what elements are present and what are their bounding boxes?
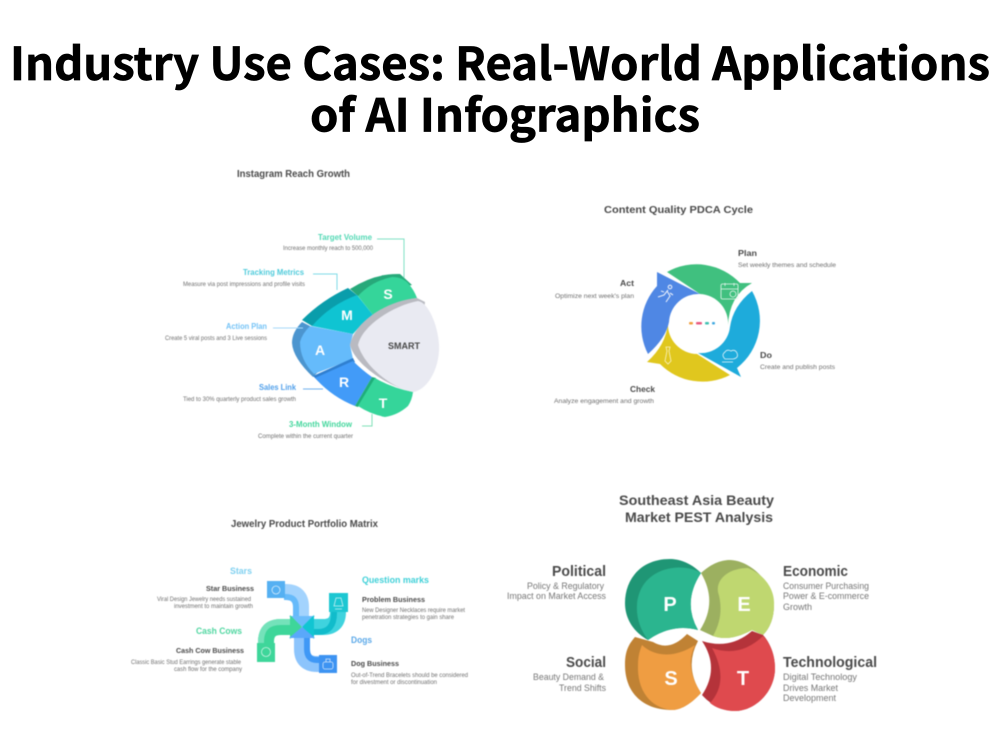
label: Target Volume: Increase monthly reach to 500,000	[283, 246, 374, 252]
label: Stars: Stars	[230, 566, 252, 576]
label: Plan: Plan	[738, 248, 757, 258]
label: Check: Analyze engagement and growth	[554, 398, 654, 405]
PEST letters: S	[664, 668, 678, 690]
SMART letters: S	[383, 286, 393, 302]
label: Economic: Consumer Purchasing	[783, 581, 869, 591]
SMART letters: T	[379, 395, 388, 411]
SMART letters: R	[339, 374, 349, 390]
label: Political: Impact on Market Access	[507, 591, 606, 601]
heading: Southeast Asia Beauty Market PEST Analysis: Southeast Asia Beauty	[619, 492, 774, 508]
label: Social: Trend Shifts	[559, 683, 606, 693]
label: Do: Create and publish posts	[760, 364, 836, 371]
PEST P segment	[625, 559, 701, 640]
label: Sales Link: Sales Link	[259, 383, 297, 392]
label: Technological: Technological	[783, 654, 877, 671]
label: Economic: Economic	[783, 563, 848, 580]
label: 3-Month Window: 3-Month Window	[289, 420, 353, 429]
label: Do: Do	[760, 350, 772, 360]
label: Question marks: penetration strategies to gain share	[362, 615, 455, 621]
title: Industry Use Cases: Real-World Applications	[10, 28, 990, 93]
heading: Southeast Asia Beauty Market PEST Analysis	[619, 492, 774, 525]
label: Act: Act	[620, 278, 634, 288]
PEST T segment	[702, 631, 775, 711]
label: 3-Month Window	[258, 420, 353, 440]
heading: Southeast Asia Beauty Market PEST Analysis: Market PEST Analysis	[625, 509, 773, 525]
label: Sales Link: Tied to 30% quarterly product sales growth	[183, 397, 296, 403]
swirl arrows	[261, 592, 338, 664]
label: Check: Check	[630, 384, 655, 394]
label: Question marks	[362, 575, 465, 621]
label: Political	[507, 563, 606, 601]
heading: Jewelry Product Portfolio Matrix: Jewelry Product Portfolio Matrix	[231, 519, 378, 530]
icon: cloud	[722, 350, 738, 362]
SMART letters: SMART	[388, 341, 420, 351]
label: Do	[760, 350, 836, 371]
label: Economic: Growth	[783, 602, 812, 612]
title	[10, 28, 990, 144]
icon: calendar	[721, 283, 738, 299]
label: Social	[533, 654, 606, 693]
label: Cash Cows: Cash Cows	[196, 626, 242, 636]
PEST E segment	[700, 560, 774, 638]
label: Act: Optimize next week's plan	[555, 293, 634, 300]
label: 3-Month Window: Complete within the current quarter	[258, 434, 353, 440]
label: Cash Cows: cash flow for the company	[174, 667, 242, 673]
label: Economic: Power & E-commerce	[783, 591, 869, 601]
PEST letters: T	[737, 668, 749, 690]
SMART letters	[315, 286, 420, 411]
label: Stars: Star Business	[206, 584, 254, 593]
label: Question marks: Question marks	[362, 575, 429, 585]
label: Target Volume	[283, 233, 374, 252]
label: Cash Cows	[131, 626, 244, 673]
SMART letters: A	[315, 342, 325, 358]
label: Social: Beauty Demand &	[533, 672, 604, 682]
label: Cash Cows: Classic Basic Stud Earrings generate stable	[131, 660, 242, 666]
PDCA cycle ring	[641, 264, 760, 382]
label: Political: Policy & Regulatory	[527, 581, 604, 591]
label: Stars: Viral Design Jewelry needs sustained	[157, 597, 251, 603]
arrow heads	[289, 615, 315, 639]
PEST letters	[663, 594, 751, 690]
label: Tracking Metrics	[183, 268, 305, 288]
label: Tracking Metrics: Tracking Metrics	[243, 268, 305, 277]
label: Cash Cows: Cash Cow Business	[176, 646, 244, 655]
label: Check	[554, 384, 655, 405]
label: Dogs: for divestment or discontinuation	[351, 680, 437, 686]
label: Sales Link	[183, 383, 297, 403]
label: Dogs: Dog Business	[351, 659, 399, 668]
label: Technological	[783, 654, 877, 703]
label: Action Plan	[165, 322, 267, 342]
SMART letters: M	[341, 307, 353, 323]
label: Question marks: Problem Business	[362, 595, 425, 604]
title: of AI Infographics	[310, 80, 700, 144]
label: Target Volume: Target Volume	[318, 233, 373, 242]
label: Act	[555, 278, 634, 300]
label: Action Plan: Action Plan	[226, 322, 267, 331]
heading: Instagram Reach Growth: Instagram Reach Growth	[237, 169, 350, 180]
label: Plan	[738, 248, 836, 269]
label: Technological: Development	[783, 693, 836, 703]
label: Plan: Set weekly themes and schedule	[738, 262, 836, 269]
panel: PDCA cycle	[554, 205, 836, 405]
label: Dogs: Dogs	[351, 635, 372, 645]
label: Dogs	[351, 635, 468, 686]
connectors	[273, 239, 404, 426]
label: Technological: Drives Market	[783, 683, 838, 693]
icon: tie	[665, 347, 671, 364]
PEST letters: E	[737, 594, 751, 616]
PEST letters: P	[663, 594, 677, 616]
label: Political: Political	[552, 563, 606, 580]
icon squares	[257, 581, 348, 673]
label: Stars: investment to maintain growth	[174, 604, 253, 610]
label: Stars	[157, 566, 254, 610]
label: Economic	[783, 563, 869, 612]
panel: portfolio matrix	[131, 519, 468, 686]
label: Social: Social	[566, 654, 606, 671]
label: Action Plan: Create 5 viral posts and 3 Live sessions	[165, 336, 267, 342]
label: Technological: Digital Technology	[783, 672, 857, 682]
panel: PEST analysis	[507, 492, 877, 711]
label: Tracking Metrics: Measure via post impressions and profile visits	[183, 282, 305, 288]
label: Dogs: Out-of-Trend Bracelets should be considered	[351, 673, 468, 679]
label: Question marks: New Designer Necklaces require market	[362, 608, 465, 614]
heading: Content Quality PDCA Cycle: Content Quality PDCA Cycle	[604, 205, 753, 216]
panel: SMART goals	[165, 169, 439, 440]
PEST S segment	[625, 634, 701, 710]
icon: runner	[658, 285, 673, 302]
center dots	[689, 322, 715, 324]
SMART diagram	[292, 274, 439, 417]
